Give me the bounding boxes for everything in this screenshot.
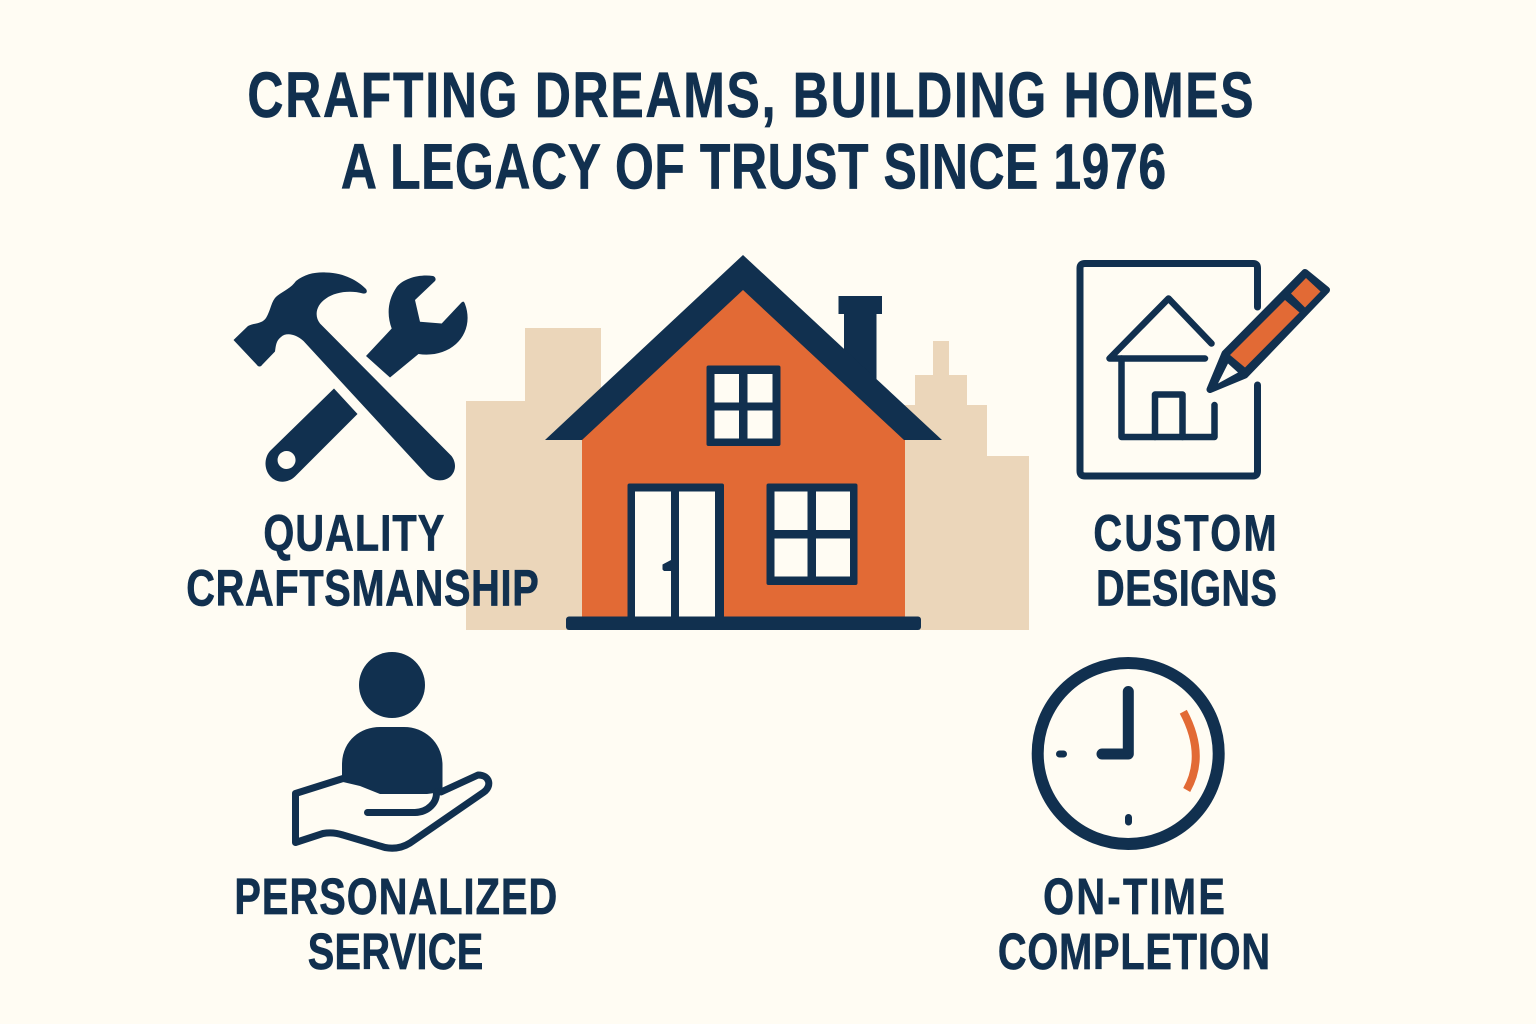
icon: person on hand [296,652,489,848]
attic window [706,366,780,446]
chimney [838,296,882,385]
title: A LEGACY OF TRUST SINCE 1976 [341,132,1166,203]
wrench head [366,275,468,378]
icon: hammer and wrench [234,272,468,482]
label: on-time completion [998,868,1270,980]
base line [566,616,921,630]
icon: blueprint with pencil [1080,264,1326,476]
label: on-time completion: COMPLETION [998,923,1270,980]
head [359,652,425,718]
roof [545,255,942,440]
hammer [234,272,455,480]
wrench handle [266,388,358,482]
label: quality craftsmanship: QUALITY [263,505,444,562]
side window [766,484,858,585]
small house [1110,298,1214,437]
label: custom designs: CUSTOM [1093,505,1277,562]
hand [296,775,489,848]
door [628,484,724,620]
body [342,727,442,794]
paper sheet [1080,264,1258,476]
pencil [1210,272,1326,390]
icon: clock [1038,663,1219,844]
label: custom designs: DESIGNS [1096,560,1277,617]
label: quality craftsmanship [186,505,539,617]
house wall [582,285,905,625]
label: quality craftsmanship: CRAFTSMANSHIP [186,560,539,617]
skyline backdrop [466,328,1029,630]
icon: central house [545,255,942,630]
label: custom designs [1093,505,1277,617]
label: personalized service: PERSONALIZED [234,868,557,925]
label: personalized service: SERVICE [308,923,483,980]
label: on-time completion: ON-TIME [1043,868,1225,925]
label: personalized service [234,868,557,980]
title [247,60,1254,203]
title: CRAFTING DREAMS, BUILDING HOMES [247,60,1254,131]
